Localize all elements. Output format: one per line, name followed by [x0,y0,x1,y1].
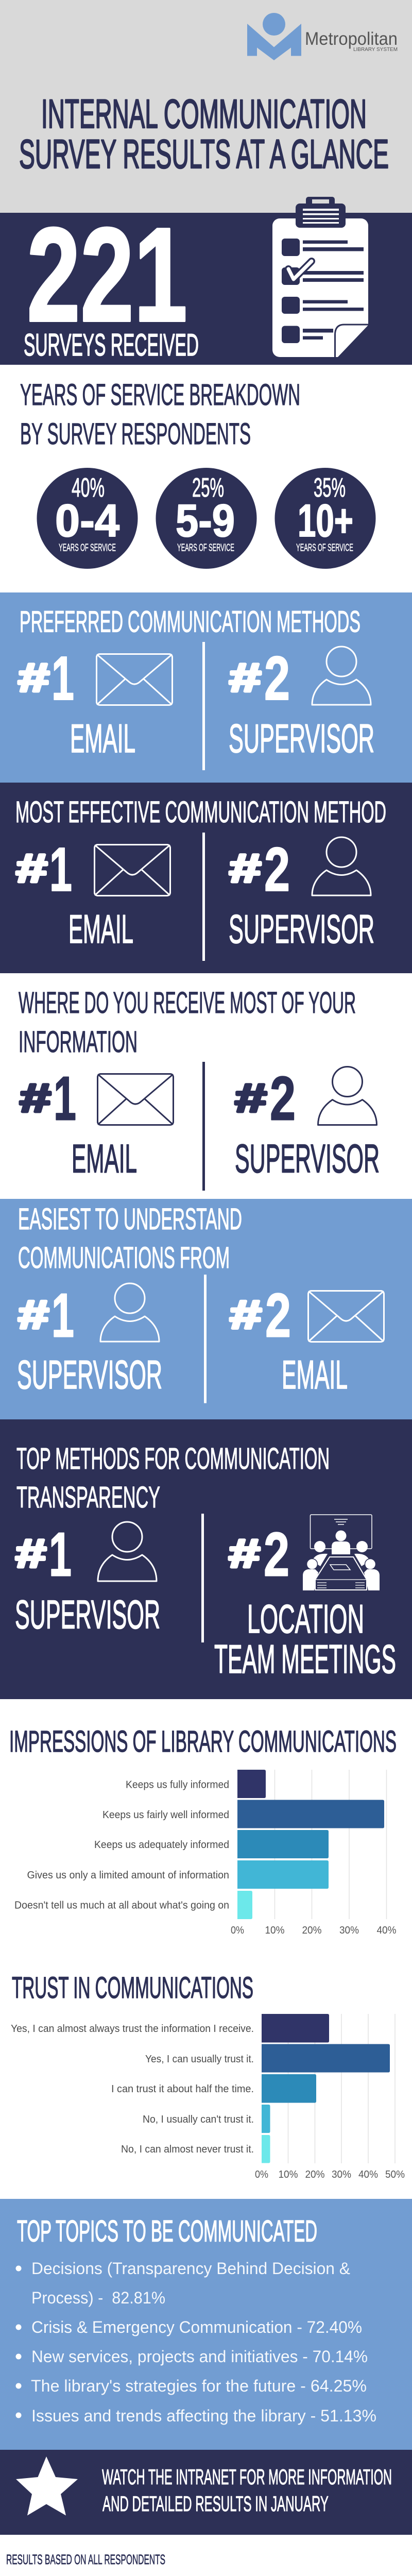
heading: EASIEST TO UNDERSTAND [18,1202,242,1236]
panel: surveys received [0,197,412,365]
axis labels [255,2169,405,2180]
circle: 0-4 years: YEARS OF SERVICE [59,542,116,553]
bar: gives us only a limited amount: Gives us only a limited amount of information [27,1870,229,1881]
circle: 5-9 years: YEARS OF SERVICE [177,542,234,553]
rank #1 [18,643,74,713]
heading: COMMUNICATIONS FROM [18,1241,230,1275]
panel: communication transparency [0,1419,412,1699]
label: email: EMAIL [70,716,135,761]
icon: envelope [95,845,170,895]
rank #1: 1 [52,643,74,713]
list: topics: New services, projects and initiatives - 70.14% [31,2347,368,2366]
circle: 5-9 years: 25% [192,473,224,503]
title [19,91,389,177]
bar: almost always: Yes, I can almost always trust the information I receive. [11,2023,254,2035]
bar: keeps us fully informed: Keeps us fully informed [126,1780,229,1791]
callout text [102,2465,392,2516]
bar: almost never: No, I can almost never trust it. [121,2144,254,2155]
label: supervisor: SUPERVISOR [15,1592,160,1637]
rank #2: # [235,1075,267,1121]
panel: header [0,0,412,213]
circle: 10+ years: 35% [314,473,346,503]
bar: keeps us adequately informed [94,1830,329,1858]
icon: person [318,1066,377,1125]
big number 221: 221 [27,200,187,350]
axis labels: 10% [278,2169,298,2180]
heading: TRANSPARENCY [16,1481,160,1514]
icon: star [16,2456,78,2515]
panel: most effective communication method [0,783,412,973]
bar: keeps us adequately informed: Keeps us adequately informed [94,1839,229,1851]
rank #2 [229,1519,289,1589]
icon: person [98,1522,157,1581]
logo: Metropolitan Library System: LIBRARY SYSTEM [353,46,398,53]
label: email: EMAIL [282,1352,348,1397]
rank #2: 2 [264,834,290,904]
panel: years of service [20,378,376,569]
circle: 10+ years [275,468,376,569]
list: topics: Process) - 82.81% [31,2289,165,2307]
bar: half the time [111,2074,316,2103]
bar chart: trust [11,2014,405,2180]
list: topics: Crisis & Emergency Communication - 72.40% [31,2318,362,2336]
rank #2: # [229,655,261,700]
panel: watch the intranet callout [0,2450,412,2535]
axis labels: 50% [385,2169,405,2180]
rank #1: # [20,1075,51,1121]
axis labels: 10% [265,1925,285,1936]
rank #1: # [16,845,47,891]
rank #1: # [18,1292,49,1337]
icon: person [312,647,371,705]
bar: keeps us fairly well informed [102,1800,384,1828]
bar: keeps us fairly well informed: Keeps us fairly well informed [102,1809,229,1821]
circle: 10+ years: YEARS OF SERVICE [296,542,353,553]
axis labels [231,1925,397,1936]
rank #1 [16,834,72,904]
circle: 0-4 years: 40% [72,473,105,503]
divider [204,1275,207,1403]
bar: keeps us fully informed [126,1770,266,1798]
icon: envelope [308,1291,384,1342]
axis labels: 40% [377,1925,397,1936]
bar: gives us only a limited amount [27,1860,329,1889]
label: location team meetings [214,1596,396,1682]
circle: 5-9 years [156,468,256,569]
icon: envelope [98,1074,173,1125]
heading [16,1442,330,1514]
bar: usually [145,2044,390,2072]
divider [202,642,205,770]
bar: usually can't [143,2105,270,2133]
rank #2: # [229,1531,260,1576]
rank #1 [15,1519,72,1589]
rank #2: # [230,1292,262,1337]
heading: INFORMATION [19,1025,138,1059]
heading [18,1202,242,1275]
rank #2 [235,1063,296,1133]
axis labels: 0% [255,2169,268,2180]
rank #2: 2 [265,1280,291,1350]
icon: team meeting [303,1515,380,1590]
bar: almost never [121,2135,270,2163]
rank #1: 1 [52,1280,74,1350]
circle: 0-4 years: 0-4 [55,495,119,546]
heading [19,986,356,1059]
panel: top topics [0,2199,412,2450]
logo: Metropolitan Library System [247,13,398,60]
axis labels: 20% [305,2169,325,2180]
label: email: EMAIL [72,1136,137,1181]
footnote: RESULTS BASED ON ALL RESPONDENTS [6,2552,165,2567]
panel: where do you receive most of your information [19,986,380,1191]
list: topics: Decisions (Transparency Behind Decision & [31,2259,350,2278]
panel: easiest to understand [0,1199,412,1420]
panel: trust in communications [11,1971,405,2180]
rank #2 [229,643,290,713]
rank #1: # [15,1531,46,1576]
rank #2 [229,834,290,904]
rank #2: 2 [264,1519,289,1589]
axis labels: 0% [231,1925,244,1936]
rank #1 [18,1280,74,1350]
rank #1 [20,1063,76,1133]
bar chart: impressions [14,1770,397,1936]
list: topics: Issues and trends affecting the library - 51.13% [31,2406,376,2425]
label: surveys received: SURVEYS RECEIVED [24,328,199,362]
label: supervisor: SUPERVISOR [17,1352,162,1397]
axis labels: 30% [332,2169,351,2180]
icon: envelope [97,654,172,705]
divider [201,1514,204,1642]
list: topics [15,2259,376,2425]
rank #2: 2 [264,643,290,713]
bar: usually: Yes, I can usually trust it. [145,2054,254,2065]
icon: person [312,837,371,895]
list: topics: The library's strategies for the future - 64.25% [31,2377,367,2395]
panel: impressions of library communications [9,1725,397,1936]
circle: 5-9 years: 5-9 [176,495,235,546]
rank #1: 1 [49,1519,72,1589]
icon: person [100,1283,159,1342]
bar: doesn't tell us much: Doesn't tell us much at all about what's going on [14,1900,229,1911]
axis labels: 20% [302,1925,322,1936]
divider [202,1062,205,1191]
bar: half the time: I can trust it about half the time. [111,2083,254,2095]
axis labels: 30% [339,1925,359,1936]
divider [202,833,205,961]
panel: preferred communication methods [0,592,412,783]
bar: almost always [11,2014,329,2042]
rank #1: # [18,655,49,700]
circle: 10+ years: 10+ [298,495,353,546]
rank #1: 1 [49,834,72,904]
rank #2: # [229,845,261,891]
icon: clipboard checklist [272,197,369,358]
circle: 0-4 years [37,468,138,569]
logo: Metropolitan Library System: Metropolitan [305,29,398,49]
bar: usually can't: No, I usually can't trust it. [143,2114,254,2125]
rank #2: 2 [270,1063,296,1133]
axis labels: 40% [358,2169,378,2180]
label: email: EMAIL [68,906,133,952]
heading: years of service [20,378,300,451]
bar: doesn't tell us much [14,1891,252,1919]
rank #1: 1 [54,1063,76,1133]
rank #2 [230,1280,291,1350]
